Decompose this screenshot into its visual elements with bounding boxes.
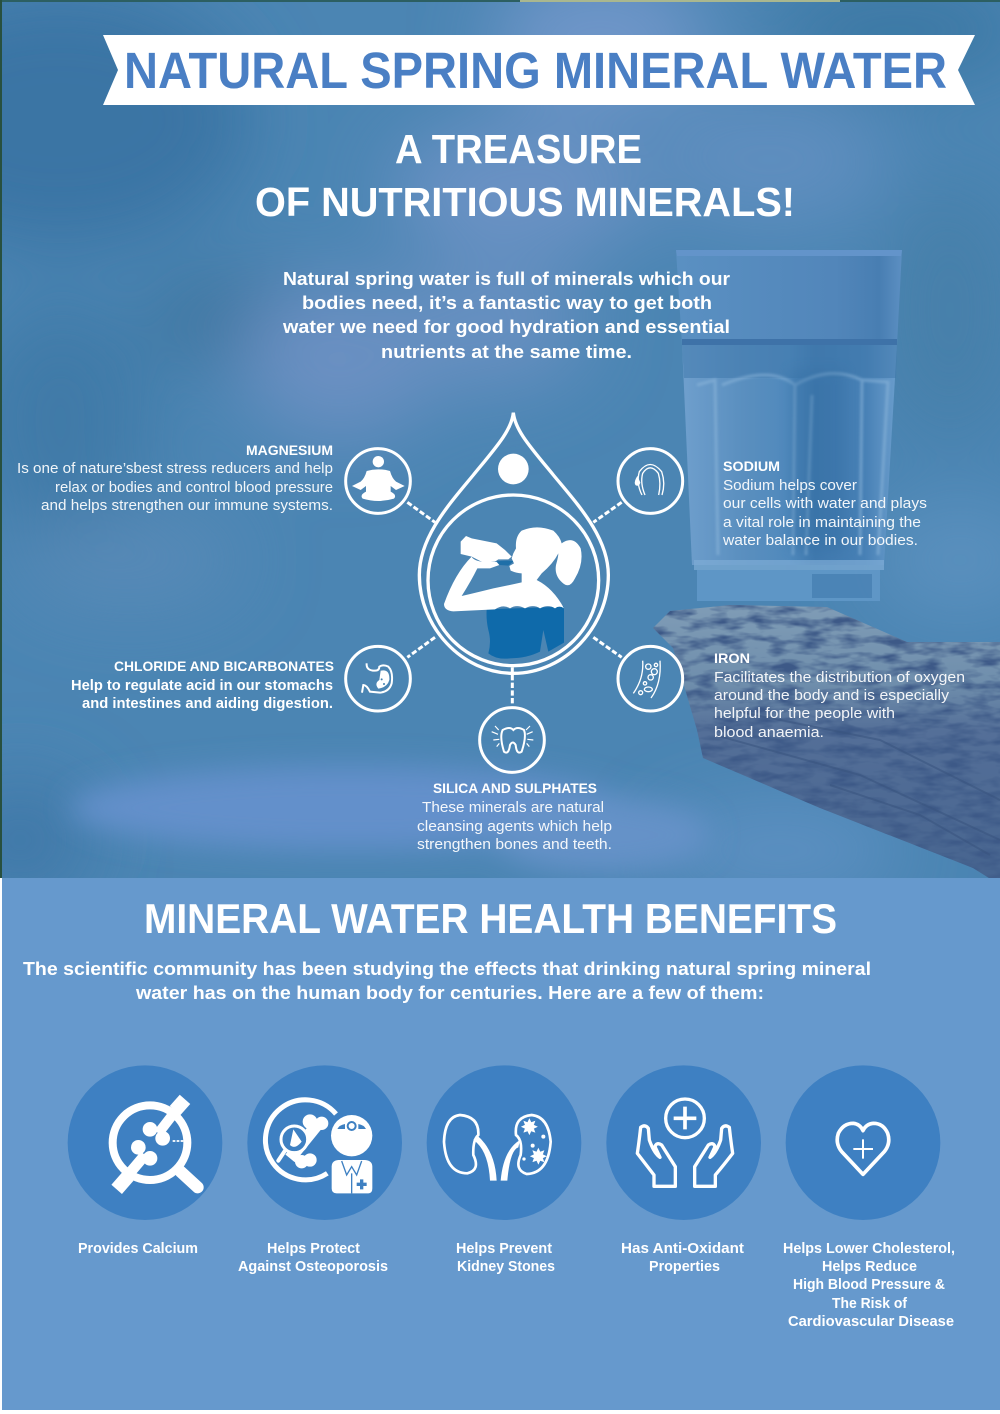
text: magnesium: and helps strengthen our immune systems. — [41, 498, 333, 514]
text: silica and sulphates: strengthen bones and teeth. — [417, 837, 612, 853]
label: has anti-oxidant properties: Properties — [649, 1259, 720, 1275]
text: magnesium: Is one of nature’sbest stress reducers and help — [17, 461, 333, 477]
heading: mineral water health benefits: MINERAL WATER HEALTH BENEFITS — [144, 895, 837, 942]
icon: meditation — [346, 449, 410, 513]
connector lines — [407, 502, 622, 705]
text: chloride and bicarbonates: and intestines and aiding digestion. — [82, 696, 333, 712]
text: iron: helpful for the people with — [714, 706, 895, 722]
text: iron: blood anaemia. — [714, 725, 824, 741]
icon: heart with plus — [786, 1065, 940, 1220]
water drop outline — [419, 413, 608, 673]
text: iron — [714, 650, 965, 741]
text: magnesium: relax or bodies and control blood pressure — [55, 480, 333, 496]
text: sodium: a vital role in maintaining the — [723, 515, 921, 531]
photo: water glass — [676, 250, 902, 601]
text: magnesium — [17, 442, 333, 514]
white dot — [498, 454, 529, 484]
intro paragraph: nutrients at the same time. — [381, 341, 632, 362]
label: helps protect against osteoporosis: Helps Protect — [267, 1241, 360, 1257]
text: chloride and bicarbonates: Help to regulate acid in our stomachs — [71, 678, 333, 694]
diagram: water drop with woman drinking and mineral icons — [346, 413, 683, 772]
label: helps protect against osteoporosis: Against Osteoporosis — [238, 1259, 388, 1275]
label: lowers cholesterol and blood pressure: Helps Lower Cholesterol, — [783, 1241, 955, 1257]
label: has anti-oxidant properties — [621, 1241, 744, 1275]
label: helps prevent kidney stones — [456, 1241, 555, 1275]
heading: a treasure of nutritious minerals — [255, 126, 795, 225]
icon: helps prevent kidney stones — [427, 1065, 581, 1220]
title banner: NATURAL SPRING MINERAL WATER — [124, 42, 947, 99]
icon: stomach — [346, 646, 410, 711]
text: magnesium: MAGNESIUM — [246, 442, 333, 458]
text: chloride and bicarbonates: CHLORIDE AND BICARBONATES — [114, 658, 334, 674]
label: lowers cholesterol and blood pressure: Helps Reduce — [822, 1259, 917, 1275]
text: iron: Facilitates the distribution of oxygen — [714, 670, 965, 686]
heading: a treasure of nutritious minerals: OF NUTRITIOUS MINERALS! — [255, 179, 795, 225]
panel: blurred photo background — [0, 0, 1000, 900]
text: sodium — [722, 458, 927, 549]
icon: helps prevent kidney stones: ✸ — [520, 1117, 538, 1139]
label: lowers cholesterol and blood pressure — [783, 1241, 955, 1330]
text: silica and sulphates — [417, 780, 612, 853]
icon: provides calcium — [68, 1065, 222, 1220]
benefits intro text — [23, 958, 871, 1003]
intro paragraph — [282, 268, 730, 362]
label: helps prevent kidney stones: Kidney Stones — [457, 1259, 555, 1275]
text: silica and sulphates: SILICA AND SULPHATES — [433, 780, 597, 796]
icon: helps prevent kidney stones: ✸ — [529, 1146, 547, 1168]
text: chloride and bicarbonates — [71, 658, 334, 712]
heading: a treasure of nutritious minerals: A TREASURE — [395, 126, 642, 172]
label: lowers cholesterol and blood pressure: High Blood Pressure & — [793, 1277, 946, 1293]
label: has anti-oxidant properties: Has Anti-Oxidant — [621, 1241, 744, 1257]
inner circle — [428, 495, 599, 666]
label: provides calcium: Provides Calcium — [78, 1241, 198, 1257]
photo edge strips — [0, 0, 1000, 878]
label: lowers cholesterol and blood pressure: Cardiovascular Disease — [788, 1314, 954, 1330]
woman drinking silhouette — [444, 527, 582, 659]
icon: helps protect against osteoporosis — [247, 1065, 402, 1220]
intro paragraph: water we need for good hydration and essential — [282, 316, 730, 337]
intro paragraph: bodies need, it’s a fantastic way to get both — [302, 292, 712, 313]
panel: health benefits background — [0, 878, 1000, 1414]
photo: mossy wooden log — [653, 605, 1000, 885]
text: silica and sulphates: These minerals are natural — [422, 800, 604, 816]
intro paragraph: Natural spring water is full of minerals which our — [283, 268, 730, 289]
label: lowers cholesterol and blood pressure: The Risk of — [832, 1296, 907, 1312]
text: silica and sulphates: cleansing agents which help — [417, 819, 612, 835]
icon: anti-oxidant hands — [606, 1065, 761, 1220]
text: iron: IRON — [714, 650, 750, 666]
text: sodium: Sodium helps cover — [723, 478, 857, 494]
text: sodium: water balance in our bodies. — [722, 533, 918, 549]
icon: blood vessel — [618, 646, 683, 711]
label: helps prevent kidney stones: Helps Prevent — [456, 1241, 552, 1257]
text: sodium: SODIUM — [723, 458, 780, 474]
benefits intro text: The scientific community has been studying the effects that drinking natural spring mineral — [23, 958, 871, 979]
text: sodium: our cells with water and plays — [723, 496, 927, 512]
icon: tooth — [480, 708, 544, 772]
icon: cell with water — [618, 449, 683, 513]
label: helps protect against osteoporosis — [238, 1241, 388, 1275]
text: iron: around the body and is especially — [714, 688, 950, 704]
benefits intro text: water has on the human body for centuries. Here are a few of them: — [135, 982, 764, 1003]
